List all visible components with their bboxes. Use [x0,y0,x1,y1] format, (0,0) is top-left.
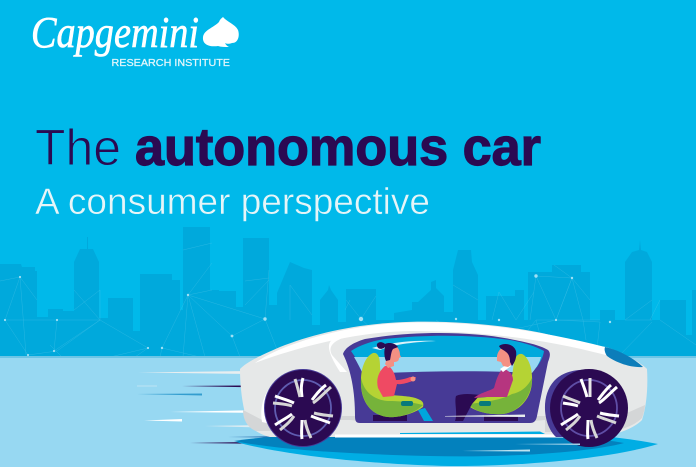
man collar [500,363,511,372]
door sill blue [400,432,545,434]
woman head [385,347,401,368]
subtitle: A consumer perspective [35,181,430,222]
title [35,118,541,177]
inner shadow [234,432,624,456]
sill white [335,434,600,438]
city skyline [0,227,696,358]
armrest left [401,401,413,406]
front wheel arch [545,370,592,437]
front wheel [550,369,628,447]
motion streaks under car [515,444,580,445]
icon: spade [203,17,239,47]
seat shade right [469,378,532,414]
spokes [273,378,333,439]
seat glare line [445,414,525,417]
seat shell right [469,354,532,414]
network lines over skyline [0,243,696,357]
title light part: The [35,119,121,176]
tyre [550,369,628,447]
seat base right [484,415,518,421]
woman torso [377,366,416,397]
tyre [264,370,342,446]
seat left [361,353,423,421]
woman hand [410,376,416,382]
car body [240,322,647,437]
lower body shade [243,405,645,432]
rear wheel arch [261,370,320,425]
window glass road [354,357,541,374]
rear wheel [264,370,342,446]
glass reflection [372,341,436,350]
headlight [605,347,643,367]
road horizon band [0,356,696,358]
woman legs [418,408,433,421]
network nodes [4,274,611,356]
rim ring [275,380,331,436]
seat right [469,354,532,421]
body crease [329,337,347,372]
motion streak lower [462,450,530,452]
window frame [343,333,550,423]
logo: Capgemini Research Institute [31,8,239,69]
woman passenger [377,342,433,421]
car shadow [234,430,658,466]
outer shadow [236,430,658,466]
logo wordmark: Capgemini [31,8,199,57]
spokes [561,378,619,439]
window glass sky [351,336,544,373]
seat base left [373,415,407,421]
man passenger [455,344,516,421]
logo subtitle: RESEARCH INSTITUTE [112,57,230,69]
armrest right [479,401,491,406]
title bold part: autonomous car [135,118,541,177]
man head [497,347,514,367]
man torso [474,368,513,398]
speed lines [137,371,300,444]
rim ring [561,380,617,436]
road [0,357,696,467]
sky background [0,0,696,358]
seat shell left [361,353,423,417]
seat shade left [361,378,423,417]
man legs [455,394,480,421]
woman hair [377,342,398,361]
body top highlight [255,322,606,363]
autonomous car [240,322,647,452]
man hair [499,344,516,366]
